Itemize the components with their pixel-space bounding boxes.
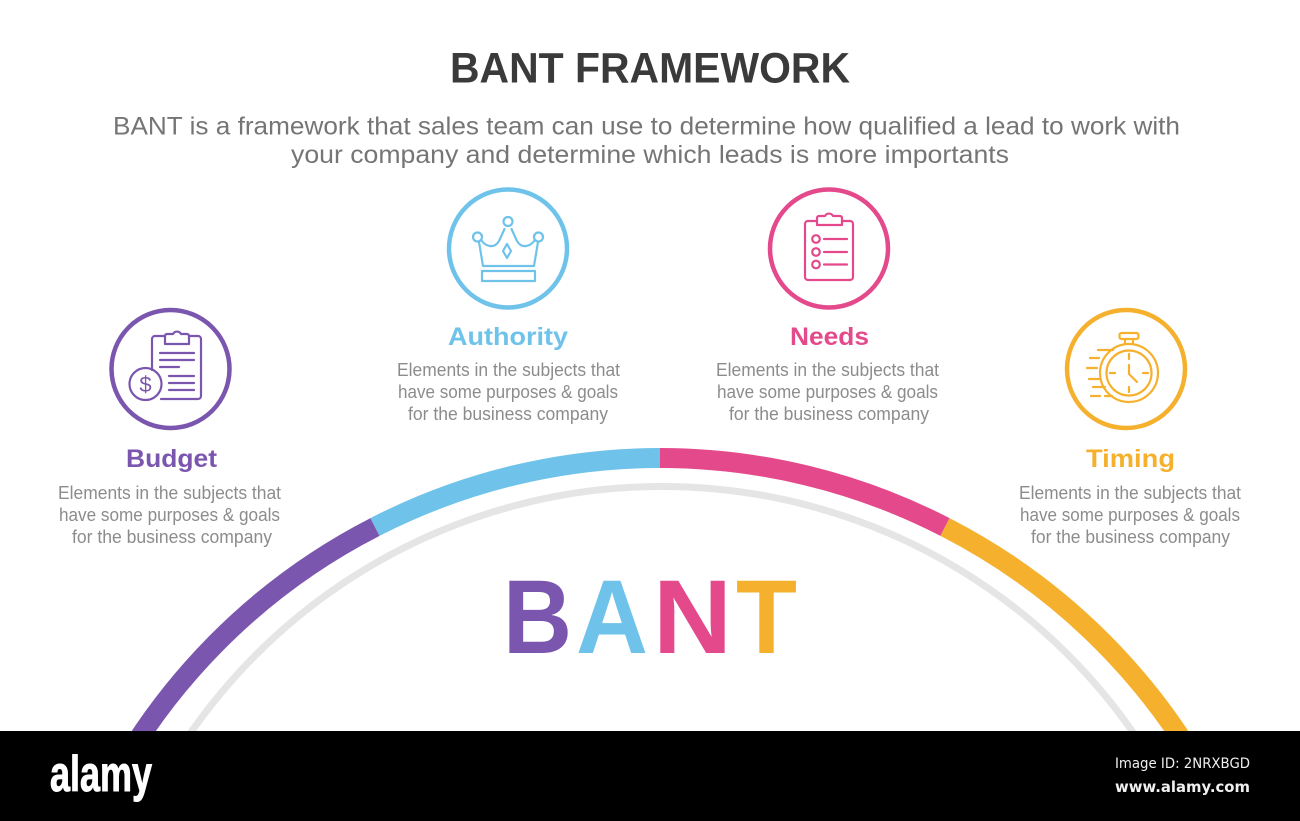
text block: budget: have some purposes & goals <box>59 505 280 525</box>
icon: checklist clipboard <box>770 190 888 308</box>
text block: authority: Elements in the subjects that <box>397 360 620 380</box>
text block: timing: Elements in the subjects that <box>1019 483 1241 503</box>
panel: authority <box>397 190 620 424</box>
subtitle: your company and determine which leads is more importants <box>291 141 1009 169</box>
heading: timing: Timing <box>1086 445 1175 473</box>
arc segment: needs <box>660 458 945 527</box>
arc segment: timing <box>945 527 1220 806</box>
text block: budget: for the business company <box>72 527 272 547</box>
icon: budget clipboard with dollar coin: $ <box>139 372 152 397</box>
text block: needs: Elements in the subjects that <box>716 360 939 380</box>
footer bar <box>0 731 1300 821</box>
icon: stopwatch <box>1067 310 1185 428</box>
BANT wordmark: B <box>503 559 572 676</box>
heading: budget: Budget <box>126 445 218 473</box>
text block: needs: have some purposes & goals <box>717 382 938 402</box>
BANT wordmark: N <box>653 559 732 676</box>
alamy logo: alamy <box>50 746 152 802</box>
inner gray arc <box>150 486 1174 800</box>
heading: needs: Needs <box>790 323 869 351</box>
panel: needs <box>716 190 939 424</box>
title: BANT FRAMEWORK <box>450 44 850 92</box>
text block: timing: for the business company <box>1031 527 1230 547</box>
subtitle: BANT is a framework that sales team can use to determine how qualified a lead to work with <box>113 112 1180 140</box>
arc segment: budget <box>100 527 375 806</box>
icon: budget clipboard with dollar coin <box>112 310 230 428</box>
website: www.alamy.com <box>1115 778 1250 796</box>
text block: authority: for the business company <box>408 404 608 424</box>
text block: budget <box>58 483 281 547</box>
semicircle arc <box>100 458 1220 806</box>
text block: budget: Elements in the subjects that <box>58 483 281 503</box>
heading: authority: Authority <box>448 323 568 351</box>
icon: crown <box>449 190 567 308</box>
image id: Image ID: 2NRXBGD <box>1115 756 1250 772</box>
text block: authority <box>397 360 620 424</box>
text block: timing <box>1019 483 1241 547</box>
panel: budget <box>58 310 281 547</box>
text block: needs <box>716 360 939 424</box>
text block: needs: for the business company <box>729 404 929 424</box>
subtitle <box>113 112 1180 169</box>
text block: authority: have some purposes & goals <box>398 382 618 402</box>
text block: timing: have some purposes & goals <box>1020 505 1240 525</box>
arc segment: authority <box>375 458 660 527</box>
BANT wordmark: T <box>736 559 797 676</box>
BANT wordmark <box>503 559 797 676</box>
BANT wordmark: A <box>576 559 648 676</box>
panel: timing <box>1019 310 1241 547</box>
